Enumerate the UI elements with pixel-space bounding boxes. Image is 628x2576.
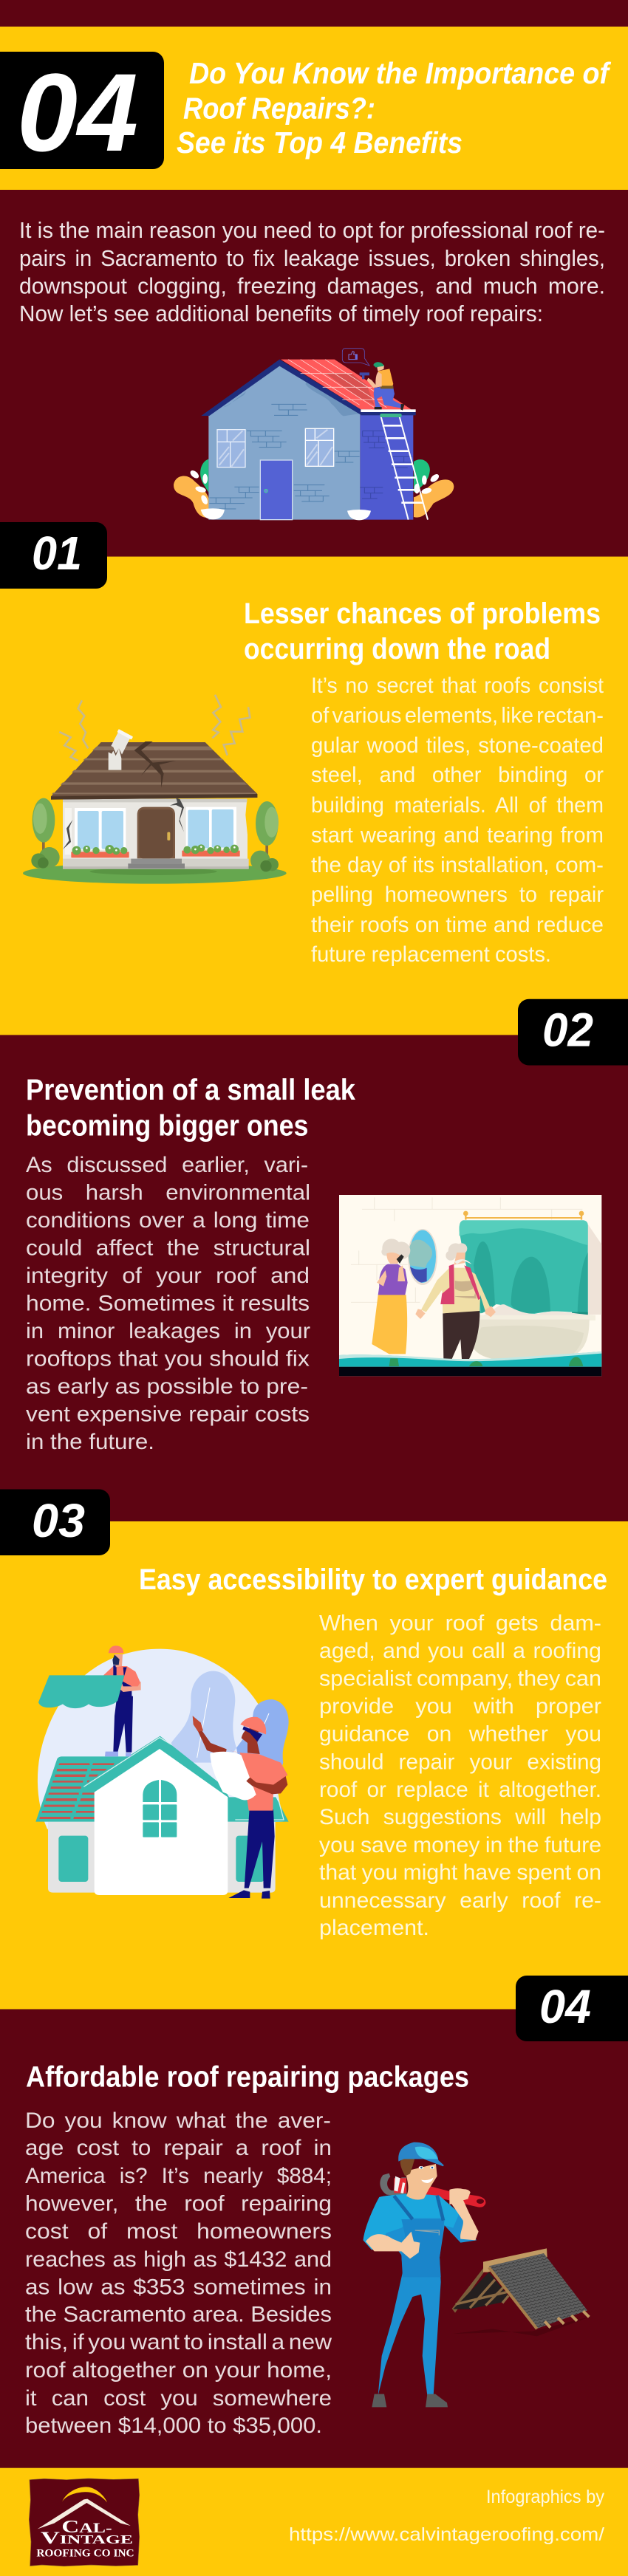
woman	[372, 1239, 410, 1366]
number badge 04: 04	[539, 1980, 591, 2033]
body text 3: aged, and you call a roofing	[319, 1639, 601, 1663]
windows	[75, 807, 236, 850]
roof model	[452, 2248, 591, 2336]
body text 4: the Sacramento area. Besides	[25, 2303, 332, 2327]
heading 2: becoming bigger ones	[26, 1110, 309, 1143]
credit text: Infographics by	[486, 2487, 604, 2507]
body text 1: steel, and other binding or	[311, 763, 604, 787]
side house	[48, 1822, 276, 1893]
roof	[51, 741, 257, 800]
body text 1: the day of its installation, com-	[311, 853, 604, 877]
logo	[29, 2479, 140, 2566]
teal roof	[35, 1736, 289, 1822]
top worker	[103, 1645, 141, 1756]
body text 4: roof altogether on your home,	[25, 2358, 332, 2383]
body text 4: between $14,000 to $35,000.	[25, 2414, 322, 2438]
body text 4: reaches as high as $1432 and	[25, 2247, 332, 2272]
speech bubble	[342, 349, 369, 366]
body text 4: America is? It’s nearly $884;	[25, 2164, 332, 2188]
lightning cracks	[59, 695, 250, 761]
intro paragraph: pairs in Sacramento to fix leakage issues, broken shingles,	[19, 245, 605, 271]
roof edge	[201, 360, 361, 416]
wall cracks	[63, 798, 184, 849]
chimney	[109, 729, 133, 770]
body text 2: ous harsh environmental	[26, 1181, 310, 1205]
body text 2: As discussed earlier, vari-	[26, 1153, 308, 1177]
intro paragraph	[19, 217, 605, 326]
body text 2: as early as possible to pre-	[26, 1374, 308, 1399]
walls	[63, 799, 248, 859]
title: Roof Repairs?:	[183, 92, 375, 126]
body text 3	[319, 1611, 601, 1940]
credit text	[289, 2487, 604, 2545]
illustration: damaged house	[23, 695, 287, 884]
red roof	[281, 360, 412, 409]
windows	[217, 428, 334, 467]
body text 3: When your roof gets dam-	[319, 1611, 601, 1636]
body text 1: of various elements, like rectan-	[311, 704, 604, 728]
wrench	[380, 2174, 485, 2207]
body text 2: rooftops that you should fix	[26, 1347, 310, 1371]
body text 1: building materials. All of them	[311, 793, 604, 818]
body text 2: in the future.	[26, 1430, 154, 1454]
body text 3: that you might have spent on	[319, 1860, 601, 1885]
illustration: roofers and house	[35, 1645, 289, 1899]
heading 4: Affordable roof repairing packages	[26, 2061, 469, 2094]
body text 1	[311, 674, 604, 967]
footer band	[0, 2468, 628, 2576]
curtain	[460, 1220, 588, 1316]
body text 3: you save money in the future	[319, 1833, 601, 1857]
title: See its Top 4 Benefits	[177, 126, 463, 160]
planters	[71, 844, 240, 857]
body text 2: in minor leakages in your	[26, 1319, 310, 1343]
heading 2: Prevention of a small leak	[26, 1074, 356, 1106]
front wall	[208, 364, 360, 520]
curtain rail	[463, 1211, 584, 1220]
big number badge: 04	[17, 50, 138, 174]
heading 2	[26, 1074, 356, 1143]
body text 2: could affect the structural	[26, 1236, 310, 1261]
teal shingle sheet	[38, 1675, 124, 1708]
body text 4: cost of most homeowners	[25, 2219, 332, 2244]
number badge 03: 03	[32, 1494, 85, 1547]
plumber body	[364, 2194, 477, 2395]
gutter	[361, 409, 416, 412]
body text 3: provide you with proper	[319, 1694, 601, 1719]
body text 2: home. Sometimes it results	[26, 1292, 310, 1316]
body text 1: It’s no secret that roofs consist	[311, 674, 604, 698]
plants	[174, 459, 454, 518]
number badge 01	[0, 522, 107, 589]
body text 2: vent expensive repair costs	[26, 1402, 310, 1427]
bricks	[209, 404, 360, 509]
intro paragraph: It is the main reason you need to opt for professional roof re-	[19, 217, 605, 243]
header band	[0, 27, 628, 190]
number badge 02	[518, 999, 628, 1065]
foreground worker	[193, 1716, 287, 1899]
body text 4: Do you know what the aver-	[25, 2109, 331, 2133]
body text 1: their roofs on time and reduce	[311, 913, 604, 937]
body text 1: start wearing and tearing from	[311, 823, 604, 848]
logo: ROOFING CO INC	[36, 2548, 134, 2560]
illustration: worker repairing house roof	[174, 349, 454, 520]
flood water	[339, 1352, 601, 1367]
body text 2: conditions over a long time	[26, 1208, 310, 1233]
section 4	[0, 1976, 628, 2468]
ladder	[380, 414, 428, 520]
body text 4: however, the roof repairing	[25, 2192, 332, 2216]
credit text: https://www.calvintageroofing.com/	[289, 2524, 604, 2545]
body text 3: should repair your existing	[319, 1750, 601, 1774]
door	[137, 807, 175, 858]
number badge 02: 02	[542, 1004, 593, 1057]
body text 4: it can cost you somewhere	[25, 2386, 332, 2411]
body text 2	[26, 1153, 310, 1454]
curtain shadow	[587, 1224, 601, 1315]
number badge 03	[0, 1489, 110, 1555]
heading 1: occurring down the road	[244, 633, 550, 665]
body text 4: age cost to repair a roof in	[25, 2136, 332, 2160]
body text 3: roof or replace it altogether.	[319, 1778, 601, 1802]
body text 4: as low as $353 sometimes in	[25, 2275, 332, 2300]
section 3	[0, 1489, 628, 2009]
section 2	[0, 999, 628, 2576]
title	[177, 56, 612, 160]
mirror	[408, 1229, 437, 1285]
head	[398, 2142, 444, 2200]
ground	[23, 863, 287, 884]
arms	[366, 2188, 479, 2258]
body text 4	[25, 2109, 332, 2438]
body text 1: gular wood tiles, stone-coated	[311, 733, 604, 758]
background trees	[171, 1671, 289, 1787]
worker	[360, 362, 404, 411]
bathtub	[471, 1304, 595, 1359]
body text 1: pelling homeowners to repair	[311, 883, 604, 907]
man	[415, 1243, 496, 1359]
roof crack	[134, 741, 176, 788]
body text 3: guidance on whether you	[319, 1722, 601, 1747]
section 1	[0, 522, 628, 1035]
backdrop	[38, 1649, 283, 1829]
white gable house	[95, 1749, 228, 1895]
number badge 01: 01	[32, 527, 82, 580]
bowls	[201, 508, 371, 520]
illustration: plumber with wrench	[364, 2142, 591, 2407]
logo: CAL-	[61, 2517, 112, 2537]
body text 3: placement.	[319, 1916, 429, 1940]
side wall	[360, 414, 413, 520]
number badge 04	[516, 1976, 628, 2041]
boots	[372, 2394, 448, 2407]
arched window	[143, 1780, 177, 1837]
door	[260, 460, 293, 520]
steps	[131, 859, 182, 863]
logo: VINTAGE	[41, 2529, 133, 2548]
body text 1: future replacement costs.	[311, 942, 551, 967]
intro paragraph: Now let’s see additional benefits of timely roof repairs:	[19, 301, 543, 326]
floor	[339, 1367, 601, 1376]
body text 2: integrity of your roof and	[26, 1264, 310, 1288]
body text 3: unnecessary early roof re-	[319, 1888, 601, 1913]
heading 1	[244, 597, 601, 665]
trees	[31, 798, 279, 871]
illustration: flooded bathroom	[339, 1195, 601, 1376]
intro paragraph: downspout clogging, freezing damages, and much more.	[19, 273, 605, 298]
body text 3: Such suggestions will help	[319, 1805, 601, 1829]
body text 4: this, if you want to install a new	[25, 2330, 332, 2354]
body text 3: specialist company, they can	[319, 1667, 601, 1691]
